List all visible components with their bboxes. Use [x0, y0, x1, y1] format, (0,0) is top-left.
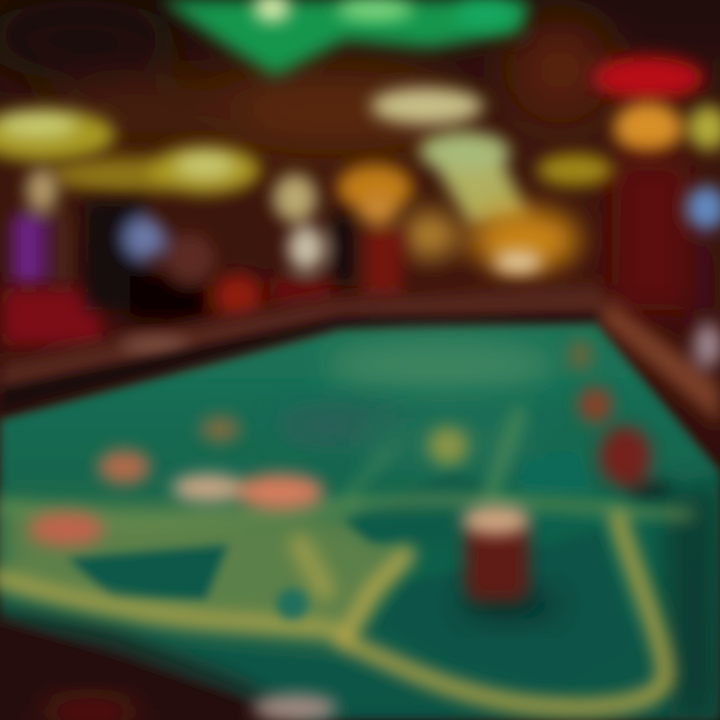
gold table lines [0, 410, 690, 708]
red chair left [2, 288, 102, 346]
small round marker [276, 588, 308, 620]
red column right [612, 160, 720, 325]
dark machines middle left [85, 200, 262, 320]
ceiling: warm wood glow [0, 0, 610, 150]
chip stack: foreground [460, 505, 560, 621]
playing cards [28, 416, 324, 546]
blue light on right [686, 186, 720, 230]
patron figure: left, purple [12, 168, 76, 285]
ceiling lamp: red shade [592, 56, 704, 100]
orange glow centre right [402, 208, 580, 272]
patron figure: centre, pale [270, 174, 402, 304]
diamond marker on felt [428, 427, 468, 465]
table felt [0, 324, 720, 720]
right rail [600, 302, 720, 425]
left lamp [0, 109, 115, 161]
yellow lamp band across the room [50, 146, 613, 212]
betting boxes [68, 450, 635, 688]
chip stacks: right edge [568, 340, 674, 499]
table rail [0, 282, 620, 412]
darker felt on right [665, 480, 720, 720]
ceiling: green neon panel [160, 0, 530, 76]
pale lamp centre [371, 88, 530, 225]
olive felt markings lower left [0, 500, 410, 640]
glowing lamps on right [614, 102, 720, 154]
foreground dark red edge [0, 615, 337, 720]
